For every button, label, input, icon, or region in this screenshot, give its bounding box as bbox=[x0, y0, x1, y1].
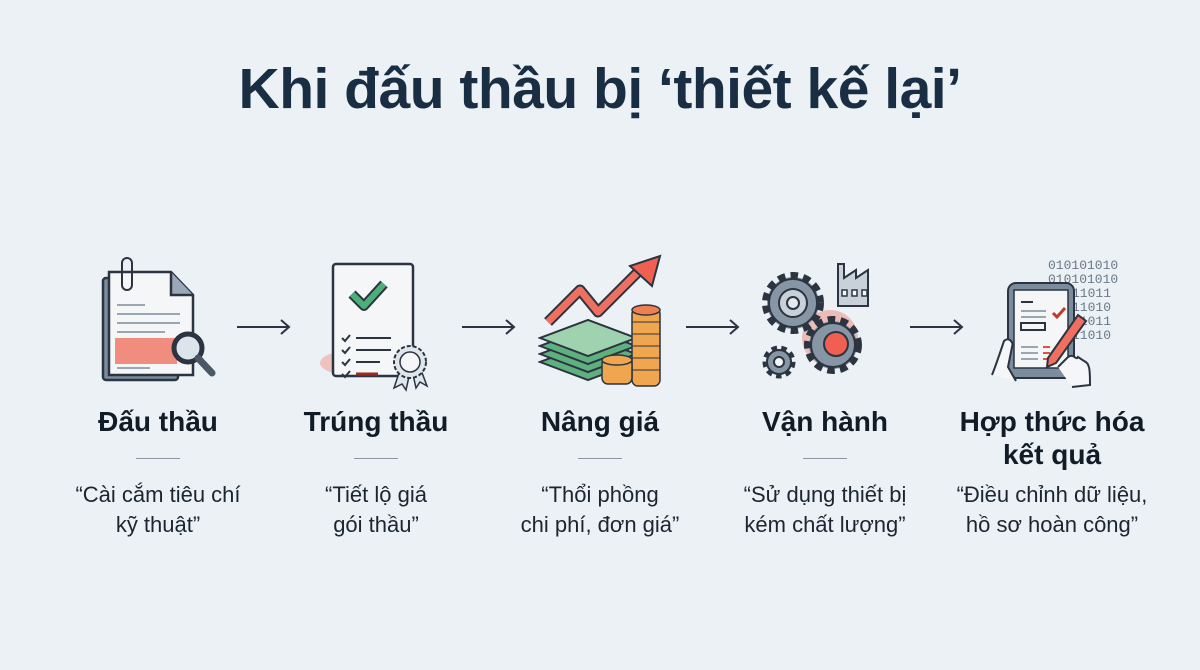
step 4: “Sử dụng thiết bị bbox=[744, 482, 906, 507]
icon: tablet with pen and binary: 010101010 bbox=[1048, 272, 1118, 287]
title: Khi đấu thầu bị ‘thiết kế lại’ bbox=[239, 57, 961, 121]
arrow 1 bbox=[237, 319, 290, 335]
step 3: chi phí, đơn giá” bbox=[521, 512, 679, 537]
icon: tablet with pen and binary: 11010 bbox=[1072, 328, 1111, 343]
icon: tablet with pen and binary: 11011 bbox=[1072, 314, 1111, 329]
step 3: “Thổi phồng bbox=[541, 482, 659, 507]
step 2: gói thầu” bbox=[333, 512, 419, 537]
step 1 bbox=[75, 406, 241, 537]
icon: checklist certificate bbox=[320, 262, 428, 392]
step 5: hồ sơ hoàn công” bbox=[966, 512, 1138, 537]
step 5 bbox=[957, 406, 1147, 537]
arrow 3 bbox=[686, 319, 740, 335]
step 5: kết quả bbox=[1003, 439, 1101, 470]
step 1: Đấu thầu bbox=[98, 406, 218, 437]
icon: tablet with pen and binary: 11010 bbox=[1072, 300, 1111, 315]
step 2: “Tiết lộ giá bbox=[325, 482, 427, 507]
icon: tablet with pen and binary: 11011 bbox=[1072, 286, 1111, 301]
step 2 bbox=[304, 406, 448, 537]
arrow 2 bbox=[462, 319, 516, 335]
step 3: Nâng giá bbox=[541, 406, 659, 437]
step 1: kỹ thuật” bbox=[116, 512, 200, 537]
step 3 bbox=[521, 406, 679, 537]
step 1: “Cài cắm tiêu chí bbox=[75, 482, 241, 507]
arrow 4 bbox=[910, 319, 964, 335]
step 2: Trúng thầu bbox=[304, 406, 448, 437]
step 4 bbox=[744, 406, 906, 537]
step 4: Vận hành bbox=[762, 406, 888, 437]
icon: document with magnifier bbox=[102, 257, 216, 382]
icon: tablet with pen and binary: 010101010 bbox=[1048, 258, 1118, 273]
step 5: “Điều chỉnh dữ liệu, bbox=[957, 482, 1147, 507]
icon: tablet with pen and binary bbox=[991, 258, 1118, 388]
step 4: kém chất lượng” bbox=[744, 512, 906, 537]
icon: money and rising arrow bbox=[538, 254, 662, 387]
icon: gears and factory bbox=[762, 263, 869, 378]
step 5: Hợp thức hóa bbox=[960, 406, 1144, 437]
